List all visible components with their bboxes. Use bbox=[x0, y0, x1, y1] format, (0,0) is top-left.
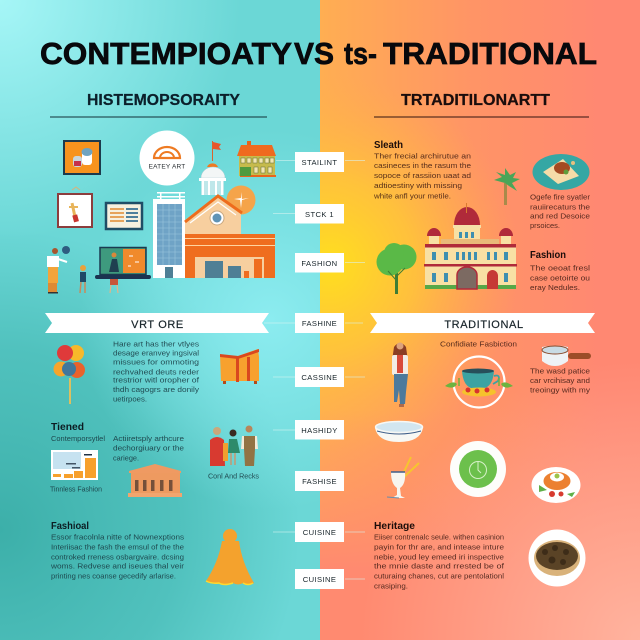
label: CASSINE bbox=[295, 367, 344, 387]
icon: teacup roundel bbox=[445, 356, 513, 408]
icon: museum building bbox=[185, 195, 275, 278]
title: CONTEMPIOATY bbox=[40, 36, 292, 71]
icon: plate of braised food bbox=[528, 530, 586, 586]
icon: woman in jeans bbox=[392, 342, 408, 407]
text: Heritage: Heritage bbox=[374, 520, 415, 532]
text: Fashional: Interiisac the fash the emsul of the the bbox=[51, 542, 184, 552]
text: Confidiate Fasbiction caption: Confidiate Fasbiction bbox=[440, 340, 517, 348]
title: VS bbox=[294, 36, 334, 71]
text: architecture note: dechorgiuary or the bbox=[113, 444, 184, 452]
text: Sleath: white anfl your metile. bbox=[373, 192, 451, 200]
icon: Eatey Art badge bbox=[140, 130, 194, 186]
icon: orange cape bbox=[206, 529, 254, 584]
text: art paragraph: uetirpoes. bbox=[113, 394, 147, 404]
text: people caption: Conl And Recks bbox=[208, 472, 259, 480]
icon: tower bbox=[153, 192, 185, 278]
text: Heritage: the mnie daste and rrested be of bbox=[374, 562, 505, 570]
text: Tiened bbox=[51, 421, 105, 443]
text: architecture note bbox=[113, 434, 184, 462]
text: Fashion: The oeoat fresl bbox=[530, 264, 590, 272]
icon: plated dish on teal tray bbox=[532, 154, 590, 190]
text: Sleath: Ther frecial archirutue an bbox=[374, 152, 471, 160]
text: Heritage bbox=[374, 520, 505, 590]
icon: green tree bbox=[376, 243, 416, 294]
label: STAILINT: STAILINT bbox=[302, 158, 337, 167]
banner: TRADITIONAL: TRADITIONAL bbox=[444, 319, 524, 331]
icon: balloons bbox=[54, 345, 85, 404]
text: art paragraph: trestrior witl oropher of bbox=[113, 376, 200, 384]
text: Tiened: Tiened bbox=[51, 421, 84, 433]
text: Timeless Fashion caption: Tinnless Fashion bbox=[50, 484, 102, 494]
text: Heritage: cuturaing chanes, cut are pentolationl bbox=[374, 572, 504, 580]
icon: cactus picture frame bbox=[58, 187, 92, 227]
text: tray dish caption: prsoices. bbox=[530, 221, 560, 230]
heading: contemporary column: HISTEMOPSORAITY bbox=[87, 92, 240, 109]
text: tray dish caption bbox=[530, 192, 591, 230]
text: Fashion: case oetoirte ou bbox=[530, 274, 590, 282]
text: Sleath: casineces in the rasum the bbox=[374, 161, 471, 170]
text: Fashion: Fashion bbox=[530, 249, 566, 261]
icon: orange chest bbox=[220, 349, 259, 384]
text: saucepan caption: car vrcihisay and bbox=[530, 376, 590, 385]
label: CASSINE: CASSINE bbox=[301, 373, 338, 382]
banner: VRT ORE: VRT ORE bbox=[131, 319, 184, 331]
text: saucepan caption: treoingy with my bbox=[530, 386, 590, 394]
text: Fashional: Fashioal bbox=[51, 520, 89, 532]
label: STAILINT bbox=[295, 152, 344, 172]
label: FASHION: FASHION bbox=[301, 259, 338, 268]
banner: VRT ORE bbox=[45, 313, 269, 333]
label: FASHISE: FASHISE bbox=[302, 477, 337, 486]
text: architecture note: Actiiretsply arthcure bbox=[113, 434, 184, 443]
icon: plate with orange dish bbox=[532, 467, 580, 503]
text: Fashional bbox=[50, 520, 185, 580]
text: art paragraph: desage eranvey ingsival bbox=[113, 348, 199, 358]
text: Heritage: payin for thr are, and intease inture bbox=[374, 542, 504, 552]
label: CUISINE upper: CUISINE bbox=[303, 528, 336, 537]
text: tray dish caption: rauiirecaturs the bbox=[530, 202, 590, 212]
text: tray dish caption: Ogefe fire syatler bbox=[530, 192, 591, 202]
text: art paragraph: rechvahed deuts reder bbox=[113, 368, 200, 376]
title bbox=[40, 36, 597, 71]
icon: palace bbox=[424, 203, 517, 289]
icon: goblet with sparks bbox=[387, 457, 419, 498]
text: Heritage: nebie, youd ley emeed iri inspective bbox=[374, 552, 504, 562]
icon: adult and child figures bbox=[47, 246, 86, 294]
icon: green clock badge bbox=[450, 441, 506, 497]
icon: sun bbox=[226, 186, 256, 214]
icon: saucepan bbox=[542, 346, 591, 366]
label: CUISINE lower bbox=[295, 569, 344, 589]
label: CUISINE upper bbox=[295, 522, 344, 542]
icon: open book frame bbox=[106, 203, 142, 229]
icon: flag bbox=[212, 141, 221, 161]
text: Fashion: eray Nedules. bbox=[530, 283, 580, 292]
label: HASHIDY: HASHIDY bbox=[301, 426, 338, 435]
banner: TRADITIONAL bbox=[370, 313, 595, 333]
icon: laptop with presenter bbox=[95, 248, 151, 293]
icon: classical temple bbox=[128, 464, 182, 497]
label: FASHINE: FASHINE bbox=[302, 319, 337, 328]
label: HASHIDY bbox=[295, 420, 344, 440]
title: TRADITIONAL bbox=[383, 36, 597, 71]
label: FASHION bbox=[295, 253, 344, 272]
text: Fashion bbox=[530, 249, 590, 292]
text: tray dish caption: and red Desoice bbox=[530, 212, 590, 220]
text: Fashional: printing nes coanse gecedify arlarise. bbox=[51, 572, 176, 580]
text: art paragraph bbox=[113, 340, 200, 404]
text: Sleath: adtioestiny with missing bbox=[374, 181, 462, 190]
text: Heritage: crasiping. bbox=[374, 582, 408, 590]
title: ts- bbox=[344, 36, 377, 71]
text: Sleath bbox=[373, 139, 471, 200]
panel: contemporary background bbox=[0, 0, 320, 640]
icon: Eatey Art badge: EATEY ART bbox=[149, 164, 185, 170]
label: FASHINE bbox=[295, 313, 344, 333]
heading: traditional column: TRTADITILONARTT bbox=[401, 92, 550, 109]
panel: traditional background bbox=[320, 0, 640, 640]
icon: three people in costume bbox=[210, 426, 258, 466]
icon: orange art frame bbox=[64, 141, 100, 174]
text: Fashional: controked rreness osbargvaire. dcsing bbox=[51, 552, 184, 562]
text: Sleath: Sleath bbox=[374, 139, 403, 151]
text: saucepan caption bbox=[530, 366, 590, 394]
icon: dome bbox=[199, 163, 226, 195]
icon: white bowl bbox=[375, 422, 423, 442]
icon: civic architecture illustration bbox=[153, 141, 275, 278]
icon: small townhouse bbox=[237, 141, 276, 177]
text: saucepan caption: The wasd patice bbox=[530, 366, 590, 376]
icon: palm tree bbox=[494, 168, 520, 205]
text: art paragraph: missues for ommoting bbox=[113, 358, 199, 366]
label: STCK 1 bbox=[295, 204, 344, 224]
chart: small bar chart card bbox=[51, 450, 98, 480]
text: Sleath: sopoce of rassiion uaat ad bbox=[374, 171, 471, 180]
label: CUISINE lower: CUISINE bbox=[303, 575, 336, 584]
text: architecture note: cariege. bbox=[113, 454, 139, 462]
center comparison labels bbox=[264, 152, 365, 589]
text: art paragraph: thdh cagogrs are donily bbox=[113, 385, 199, 394]
label: FASHISE bbox=[295, 471, 344, 491]
label: STCK 1: STCK 1 bbox=[305, 210, 334, 219]
text: Tiened: Contemporsytlel bbox=[51, 434, 105, 443]
text: Heritage: Eiiser contrenalc seule. withen casinion bbox=[374, 532, 504, 542]
text: Fashional: Essor fracolnla nitte of Nownexptions bbox=[51, 532, 184, 542]
text: art paragraph: Hare art has ther vtlyes bbox=[113, 340, 199, 348]
text: Fashional: woms. Redvese and iseues thal veir bbox=[50, 562, 185, 570]
